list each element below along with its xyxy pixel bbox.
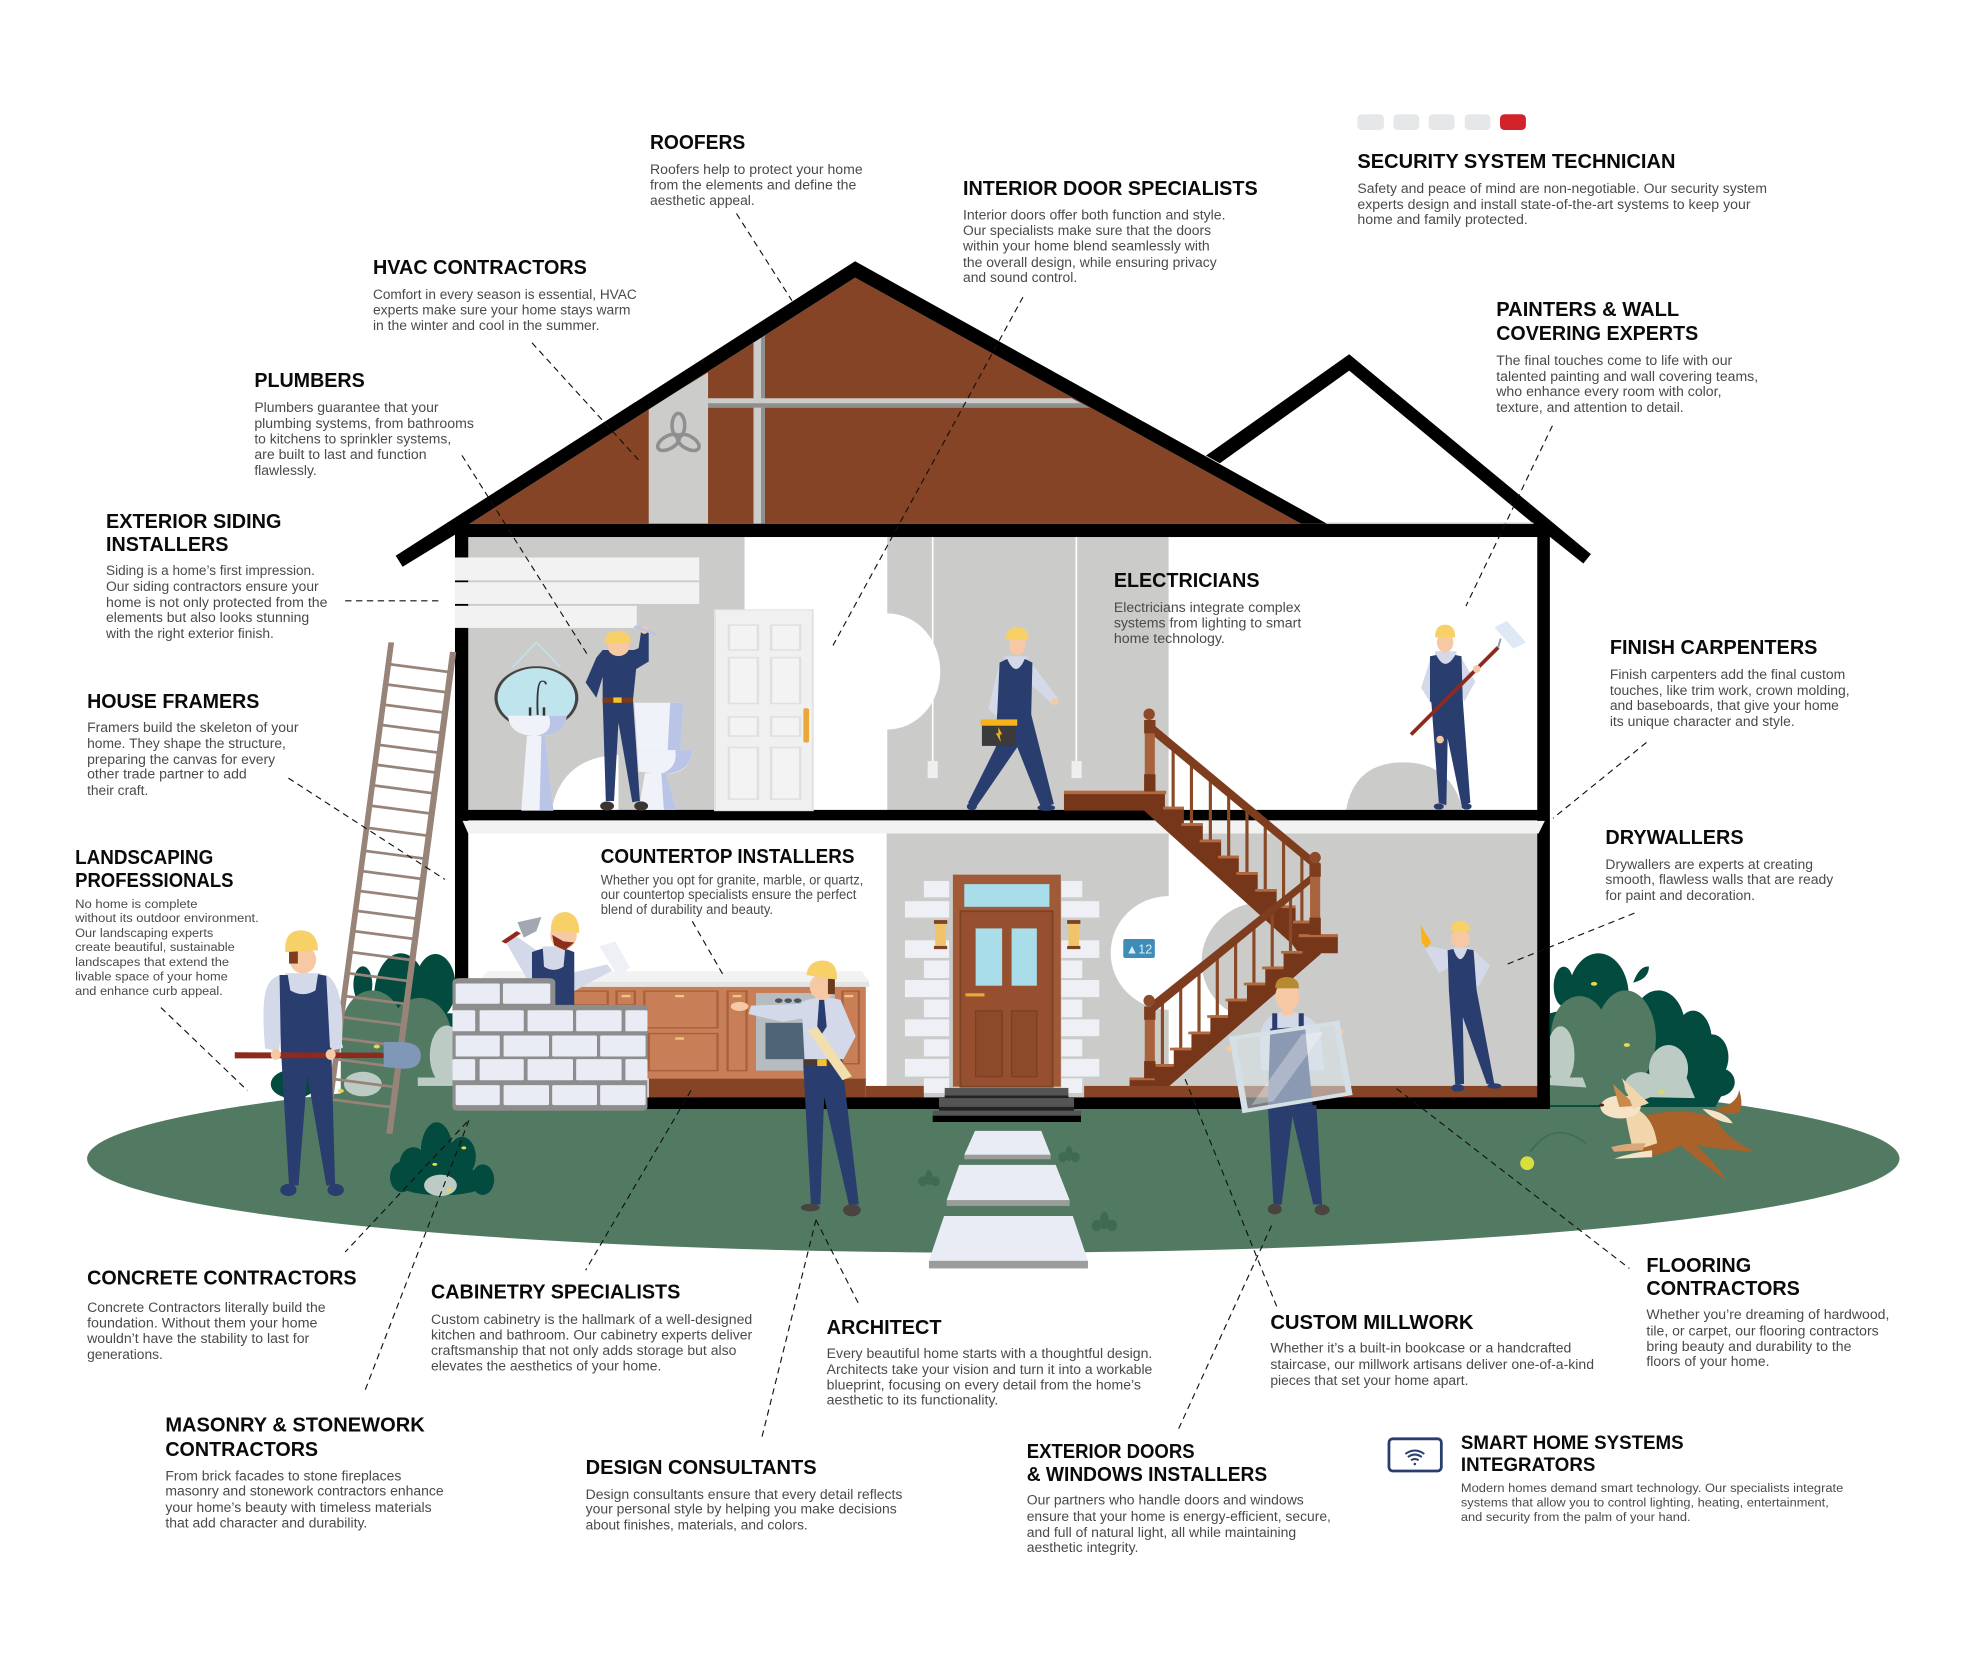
upstairs walls xyxy=(468,536,1537,810)
thermostat xyxy=(1123,939,1155,958)
text: cabinetry specialists: craftsmanship that not only adds storage but also xyxy=(431,1343,736,1358)
text: design consultants xyxy=(586,1457,903,1533)
balusters xyxy=(1162,748,1302,1064)
text: roofers xyxy=(650,132,863,208)
text: landscaping professionals: No home is complete xyxy=(75,897,198,911)
text: electricians xyxy=(1114,570,1302,646)
text: masonry and stonework contractors xyxy=(165,1415,444,1531)
right bush behind the house xyxy=(1547,953,1735,1107)
text: architect xyxy=(827,1317,1152,1408)
text: roofers: aesthetic appeal. xyxy=(650,193,755,208)
text: exterior siding installers xyxy=(105,511,328,641)
thermostat: ▲12 xyxy=(1126,943,1152,957)
text: landscaping professionals: LANDSCAPING xyxy=(75,847,213,869)
text: drywallers xyxy=(1605,827,1833,903)
text: plumbers: flawlessly. xyxy=(254,463,317,478)
text: house framers: preparing the canvas for every xyxy=(87,752,275,767)
text: security system technician: experts design and install state-of-the-art systems to keep your xyxy=(1357,197,1751,212)
brick wall xyxy=(452,978,647,1111)
text: custom millwork: pieces that set your home apart. xyxy=(1270,1373,1468,1388)
upper flight xyxy=(1144,795,1338,953)
text: design consultants: about finishes, materials, and colors. xyxy=(586,1518,808,1533)
text: interior door specialists: the overall design, while ensuring privacy xyxy=(963,255,1217,270)
text: exterior siding installers: EXTERIOR SIDING xyxy=(106,511,281,533)
text: interior door specialists xyxy=(962,178,1258,285)
figure: plumber with wrench xyxy=(586,626,656,811)
pull cords and switches xyxy=(928,536,1082,778)
black structure xyxy=(455,524,1550,1109)
text: landscaping professionals: without its outdoor environment. xyxy=(74,911,259,925)
text: landscaping professionals: landscapes that extend the xyxy=(75,955,229,969)
text: plumbers: PLUMBERS xyxy=(254,370,365,392)
text: interior door specialists: within your home blend seamlessly with xyxy=(962,239,1210,254)
downstairs walls xyxy=(468,810,1538,1098)
text: exterior doors and windows installers: ensure that your home is energy-efficient, secure, xyxy=(1027,1509,1331,1524)
toilet xyxy=(634,703,692,810)
figure: drywaller with drill xyxy=(1421,921,1501,1092)
text: exterior siding installers: with the right exterior finish. xyxy=(105,626,274,641)
text: custom millwork: Whether it’s a built-in bookcase or a handcrafted xyxy=(1270,1341,1571,1356)
text: finish carpenters: FINISH CARPENTERS xyxy=(1610,637,1817,659)
text: plumbers: plumbing systems, from bathrooms xyxy=(254,416,474,431)
text: drywallers: Drywallers are experts at creating xyxy=(1605,857,1813,872)
text: flooring contractors: CONTRACTORS xyxy=(1646,1278,1800,1300)
figure: painter with roller xyxy=(1411,621,1526,810)
text: cabinetry specialists: CABINETRY SPECIALISTS xyxy=(431,1282,680,1304)
staircase xyxy=(1064,708,1338,1086)
text: security system technician: SECURITY SYSTEM TECHNICIAN xyxy=(1357,151,1675,173)
text: cabinetry specialists: Custom cabinetry is the hallmark of a well-designed xyxy=(431,1312,752,1327)
text: flooring contractors: bring beauty and durability to the xyxy=(1646,1339,1852,1354)
text: masonry and stonework contractors: masonry and stonework contractors enhance xyxy=(165,1484,444,1499)
text: concrete contractors xyxy=(86,1267,357,1362)
text: security system technician xyxy=(1357,151,1767,227)
siding planks xyxy=(455,557,699,628)
oven xyxy=(756,993,835,1071)
callout leader lines xyxy=(161,214,1646,1441)
text: drywallers: DRYWALLERS xyxy=(1605,827,1744,849)
text: exterior doors and windows installers: aesthetic integrity. xyxy=(1027,1540,1138,1555)
text: roofers: Roofers help to protect your home xyxy=(650,162,863,177)
ground lawn xyxy=(87,1065,1899,1253)
text: design consultants: Design consultants ensure that every detail reflects xyxy=(586,1487,903,1502)
text: drywallers: smooth, flawless walls that are ready xyxy=(1605,872,1833,887)
text: interior door specialists: and sound control. xyxy=(963,270,1077,285)
text: flooring contractors: Whether you’re dreaming of hardwood, xyxy=(1646,1307,1889,1322)
text: exterior doors and windows installers xyxy=(1027,1441,1331,1555)
text: cabinetry specialists: elevates the aesthetics of your home. xyxy=(431,1359,661,1374)
text: finish carpenters: and baseboards, that give your home xyxy=(1610,698,1839,713)
text: house framers: HOUSE FRAMERS xyxy=(87,691,259,713)
figure: landscaper with shovel xyxy=(235,930,421,1196)
text: custom millwork xyxy=(1270,1312,1594,1388)
text: landscaping professionals: Our landscaping experts xyxy=(75,926,213,940)
text: hvac contractors: HVAC CONTRACTORS xyxy=(373,257,587,279)
icon: smart home wifi xyxy=(1389,1439,1441,1471)
text: painters and wall covering experts: COVERING EXPERTS xyxy=(1496,323,1698,345)
lanterns xyxy=(934,920,1080,949)
text: concrete contractors: Concrete Contractors literally build the xyxy=(87,1300,326,1315)
text: masonry and stonework contractors: your home’s beauty with timeless materials xyxy=(165,1500,432,1515)
text: architect: Every beautiful home starts with a thoughtful design. xyxy=(827,1346,1152,1361)
text: plumbers xyxy=(254,370,474,478)
text: flooring contractors xyxy=(1646,1255,1889,1369)
text: design consultants: your personal style by helping you make decisions xyxy=(586,1502,897,1517)
text: masonry and stonework contractors: MASONRY & STONEWORK xyxy=(165,1415,425,1437)
text: flooring contractors: FLOORING xyxy=(1646,1255,1751,1277)
attic interior xyxy=(470,278,1301,524)
door panels xyxy=(976,1011,1002,1077)
text: electricians: systems from lighting to smart xyxy=(1114,615,1302,630)
text: flooring contractors: floors of your home. xyxy=(1646,1354,1769,1369)
text: concrete contractors: foundation. Without them your home xyxy=(87,1316,317,1331)
ball xyxy=(1520,1133,1586,1170)
text: countertop installers: Whether you opt for granite, marble, or quartz, xyxy=(601,873,863,888)
kitchen counter and cabinets xyxy=(480,971,869,1079)
figure: installer holding window xyxy=(1226,977,1349,1215)
text: exterior doors and windows installers: Our partners who handle doors and windows xyxy=(1027,1493,1304,1508)
garage roof xyxy=(1206,354,1591,564)
text: house framers: home. They shape the structure, xyxy=(87,736,286,751)
text: electricians: ELECTRICIANS xyxy=(1114,570,1260,592)
text: custom millwork: staircase, our millwork artisans deliver one-of-a-kind xyxy=(1270,1357,1594,1372)
text: finish carpenters: Finish carpenters add the final custom xyxy=(1610,667,1845,682)
text: architect: Architects take your vision and turn it into a workable xyxy=(827,1362,1152,1377)
text: house framers: other trade partner to add xyxy=(87,767,247,782)
text: house framers: their craft. xyxy=(87,783,148,798)
figure: mason with trowel xyxy=(504,912,630,1006)
text: painters and wall covering experts: The final touches come to life with our xyxy=(1496,353,1733,368)
text: painters and wall covering experts xyxy=(1495,299,1758,415)
text: finish carpenters: its unique character and style. xyxy=(1610,714,1795,729)
text: exterior siding installers: INSTALLERS xyxy=(106,534,228,556)
text: exterior siding installers: Siding is a home’s first impression. xyxy=(106,563,315,578)
text: roofers: from the elements and define the xyxy=(650,177,856,192)
front steps xyxy=(933,1088,1081,1122)
text: landscaping professionals: and enhance curb appeal. xyxy=(75,984,223,998)
text: interior door specialists: INTERIOR DOOR SPECIALISTS xyxy=(963,178,1258,200)
text: hvac contractors: experts make sure your home stays warm xyxy=(373,302,630,317)
text: electricians: home technology. xyxy=(1114,631,1225,646)
paving stones xyxy=(929,1131,1088,1268)
house cross-section xyxy=(396,261,1591,1109)
text: countertop installers: blend of durability and beauty. xyxy=(601,902,773,917)
bathroom fixtures xyxy=(496,642,692,811)
text: architect: ARCHITECT xyxy=(827,1317,942,1339)
text: exterior siding installers: elements but also looks stunning xyxy=(106,610,309,625)
door frame xyxy=(953,875,1061,1087)
text: countertop installers: our countertop specialists ensure the perfect xyxy=(601,887,857,902)
lower flight xyxy=(1130,951,1321,1086)
text: landscaping professionals: PROFESSIONALS xyxy=(75,870,233,892)
attic pipes xyxy=(708,333,1089,524)
mirror xyxy=(496,642,577,728)
text: plumbers: Plumbers guarantee that your xyxy=(254,400,439,415)
text: smart home systems integrators: SMART HOME SYSTEMS xyxy=(1461,1433,1684,1454)
text: flooring contractors: tile, or carpet, our flooring contractors xyxy=(1646,1323,1879,1338)
door windows xyxy=(976,928,1002,986)
handrails xyxy=(1149,726,1320,869)
text: smart home systems integrators: and security from the palm of your hand. xyxy=(1461,1510,1691,1524)
text: masonry and stonework contractors: CONTRACTORS xyxy=(165,1439,318,1461)
interior door xyxy=(715,610,813,811)
text: masonry and stonework contractors: that add character and durability. xyxy=(165,1516,367,1531)
text: hvac contractors: in the winter and cool in the summer. xyxy=(373,318,600,333)
text: landscaping professionals xyxy=(74,847,259,998)
grass tufts xyxy=(918,1146,1117,1231)
text: drywallers: for paint and decoration. xyxy=(1605,888,1755,903)
text: painters and wall covering experts: PAINTERS & WALL xyxy=(1496,299,1679,321)
text: house framers xyxy=(87,691,299,798)
text: interior door specialists: Our specialists make sure that the doors xyxy=(963,223,1211,238)
text: exterior doors and windows installers: and full of natural light, all while maintaining xyxy=(1027,1525,1296,1540)
text: exterior doors and windows installers: EXTERIOR DOORS xyxy=(1027,1441,1195,1463)
newel posts xyxy=(1143,708,1321,1078)
text: security system technician: home and family protected. xyxy=(1357,212,1528,227)
text: smart home systems integrators xyxy=(1461,1433,1844,1524)
text: countertop installers xyxy=(601,846,863,917)
floors and baseboards xyxy=(649,1078,1539,1099)
text: countertop installers: COUNTERTOP INSTALLERS xyxy=(601,846,854,868)
stones xyxy=(905,881,1099,1093)
text: plumbers: to kitchens to sprinkler systems, xyxy=(254,431,451,446)
text: exterior siding installers: Our siding contractors ensure your xyxy=(106,579,319,594)
text: concrete contractors: generations. xyxy=(87,1347,163,1362)
text: electricians: Electricians integrate complex xyxy=(1114,600,1301,615)
text: design consultants: DESIGN CONSULTANTS xyxy=(586,1457,817,1479)
text: concrete contractors: wouldn’t have the stability to last for xyxy=(86,1331,310,1346)
text: interior door specialists: Interior doors offer both function and style. xyxy=(963,208,1226,223)
hvac duct xyxy=(649,372,708,524)
left bush behind the house xyxy=(271,953,464,1099)
text: smart home systems integrators: systems that allow you to control lighting, heating, entertainment, xyxy=(1461,1496,1829,1510)
figure: electrician with toolbox xyxy=(967,627,1059,811)
text: custom millwork: CUSTOM MILLWORK xyxy=(1270,1312,1474,1334)
figure: architect with blueprint xyxy=(731,961,861,1216)
text: cabinetry specialists xyxy=(431,1282,753,1374)
text: painters and wall covering experts: who enhance every room with color, xyxy=(1495,384,1722,399)
text: finish carpenters: touches, like trim work, crown molding, xyxy=(1610,683,1850,698)
crown molding xyxy=(463,821,1545,834)
text: masonry and stonework contractors: From brick facades to stone fireplaces xyxy=(165,1469,402,1484)
text: painters and wall covering experts: talented painting and wall covering teams, xyxy=(1496,369,1758,384)
dog and ball xyxy=(1520,1078,1754,1181)
front bush xyxy=(390,1122,494,1196)
text: landscaping professionals: create beautiful, sustainable xyxy=(75,940,235,954)
text: concrete contractors: CONCRETE CONTRACTORS xyxy=(87,1267,357,1289)
upper landing xyxy=(1064,791,1166,811)
text: cabinetry specialists: kitchen and bathroom. Our cabinetry experts deliver xyxy=(431,1328,753,1343)
sink xyxy=(508,716,567,811)
text: architect: blueprint, focusing on every detail from the home’s xyxy=(827,1378,1141,1393)
main roof xyxy=(396,261,1327,567)
text: landscaping professionals: livable space of your home xyxy=(75,970,228,984)
icon: hvac fan xyxy=(655,413,702,454)
text: hvac contractors: Comfort in every season is essential, HVAC xyxy=(373,287,637,302)
text: exterior siding installers: home is not only protected from the xyxy=(106,595,328,610)
pagination pills xyxy=(1357,114,1526,130)
text: roofers: ROOFERS xyxy=(650,132,745,154)
text: house framers: Framers build the skeleton of your xyxy=(87,720,299,735)
text: smart home systems integrators: Modern homes demand smart technology. Our specialists integrate xyxy=(1461,1481,1844,1495)
text: finish carpenters xyxy=(1610,637,1850,729)
front door with stone surround xyxy=(905,875,1099,1093)
text: architect: aesthetic to its functionality. xyxy=(827,1393,998,1408)
text: plumbers: are built to last and function xyxy=(254,447,427,462)
text: smart home systems integrators: INTEGRATORS xyxy=(1461,1455,1595,1476)
text: hvac contractors xyxy=(373,257,637,333)
ladder xyxy=(331,642,453,1134)
text: exterior doors and windows installers: & WINDOWS INSTALLERS xyxy=(1027,1464,1267,1486)
text: painters and wall covering experts: texture, and attention to detail. xyxy=(1496,400,1684,415)
text: security system technician: Safety and peace of mind are non-negotiable. Our security system xyxy=(1357,181,1767,196)
